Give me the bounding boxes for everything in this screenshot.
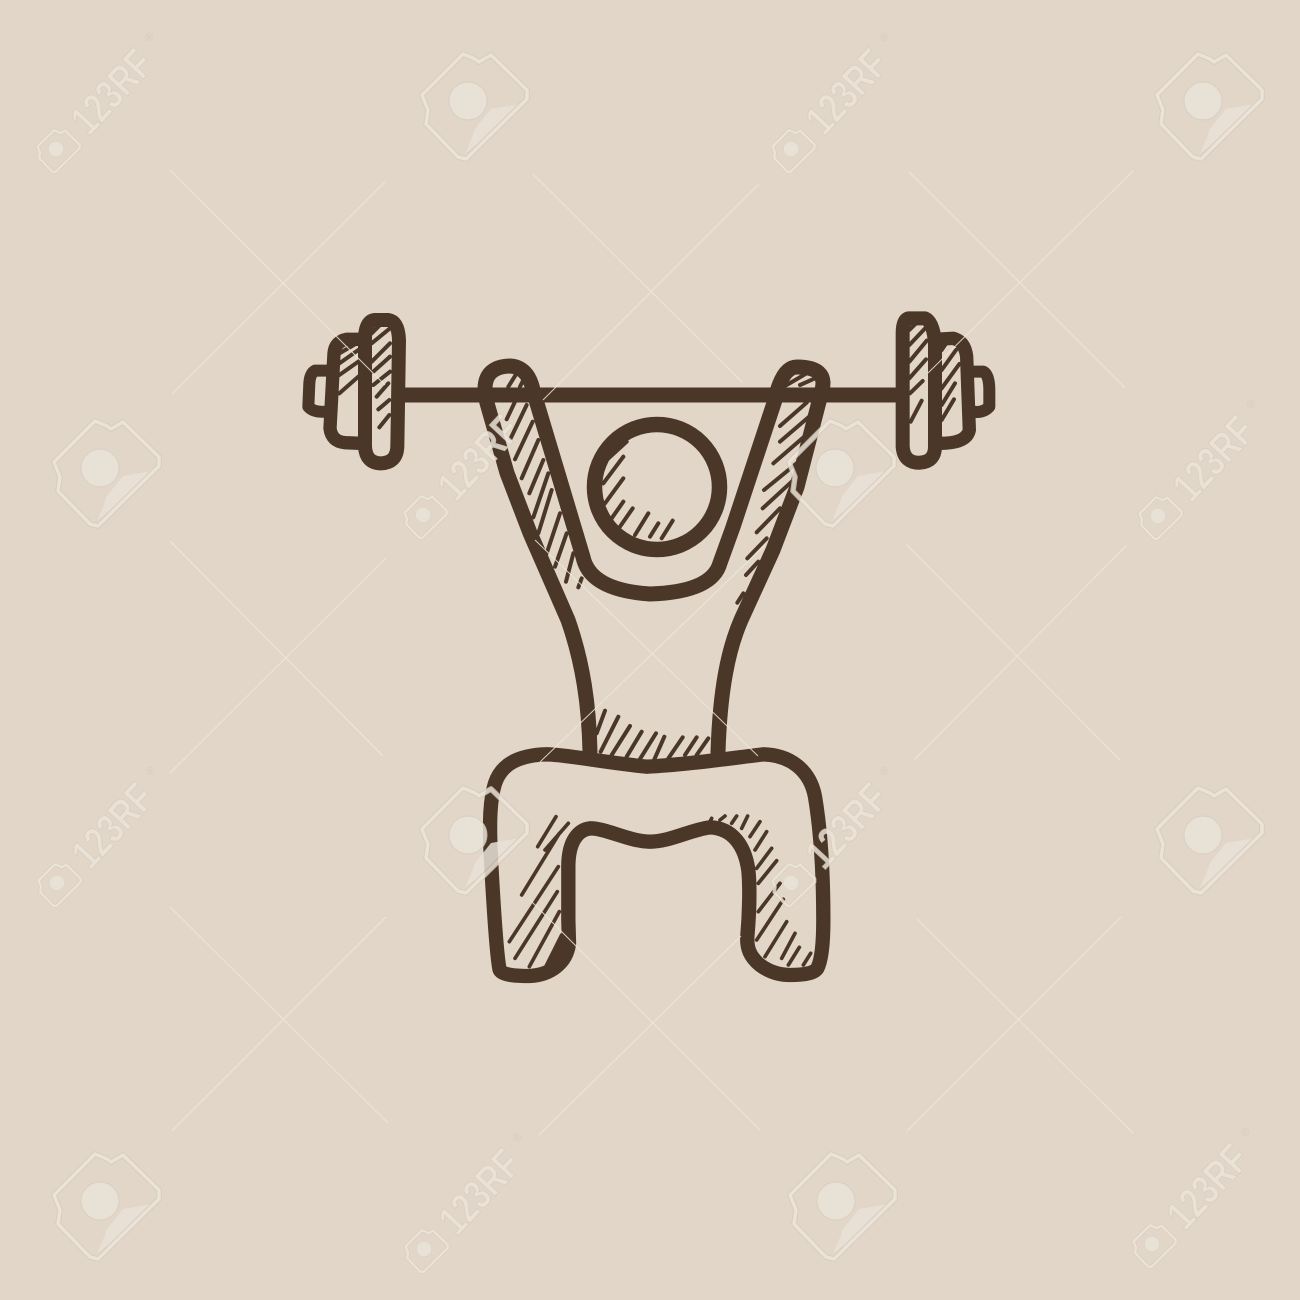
logo: upper centre-left: 123RF: [428, 406, 529, 509]
hatching: head left: [603, 442, 648, 535]
logo: lower left: 123RF: [62, 774, 163, 877]
hatching: right leg: [710, 816, 811, 965]
arms and torso outline: [485, 366, 823, 752]
logo: top centre-right: 123RF: [796, 40, 897, 143]
logo: top left: 123RF: [61, 40, 162, 143]
logo: bottom centre-left: 123RF: [429, 1140, 530, 1243]
logo: upper centre-left: [405, 406, 529, 538]
egg icon: bottom middle: [790, 1154, 895, 1259]
logo: bottom right: 123RF: [1157, 1135, 1258, 1238]
logo: bottom centre-left: ®: [513, 1132, 521, 1144]
head: [594, 424, 720, 550]
egg icon: top right: [1157, 54, 1262, 159]
hatching: right plates: [909, 323, 959, 422]
left foot shading: [547, 937, 568, 970]
hatching: head right: [650, 521, 673, 538]
egg icon: top centre: [422, 54, 527, 159]
logo: bottom right: [1134, 1127, 1258, 1267]
logo: top left: [38, 32, 162, 172]
logo: upper right: [1140, 399, 1264, 539]
right weight plates: [650, 318, 989, 603]
egg icon: lower middle: [422, 788, 527, 893]
hips and legs outline: [490, 711, 823, 976]
logo: upper right: 123RF: [1163, 407, 1264, 510]
logo: lower left: ®: [146, 766, 154, 778]
hatching: left leg: [509, 817, 568, 968]
egg icon: bottom left: [54, 1154, 159, 1259]
hatching: left arm: [507, 373, 582, 587]
logo: bottom centre-left: [406, 1132, 530, 1272]
icon: weightlifter: [308, 318, 989, 976]
hatching: right arm: [737, 373, 815, 603]
logo: upper right: ®: [1247, 399, 1255, 411]
left weight plates: [308, 320, 648, 587]
egg icon: upper middle: [789, 421, 894, 526]
logo: lower centre-right: [773, 766, 897, 906]
egg icon: upper left: [54, 421, 159, 526]
hatching: left plates: [339, 322, 390, 427]
barbell bar: [405, 388, 895, 402]
logo: lower centre-right: 123RF: [796, 774, 897, 877]
logo: lower left: [39, 766, 163, 906]
logo: bottom right: ®: [1241, 1127, 1249, 1139]
hatching: torso: [597, 711, 708, 762]
logo: lower centre-right: ®: [880, 766, 888, 778]
egg icon: lower right: [1157, 788, 1262, 893]
logo: top left: ®: [145, 32, 153, 44]
logo: top centre-right: ®: [880, 32, 888, 44]
logo: top centre-right: [773, 32, 897, 172]
